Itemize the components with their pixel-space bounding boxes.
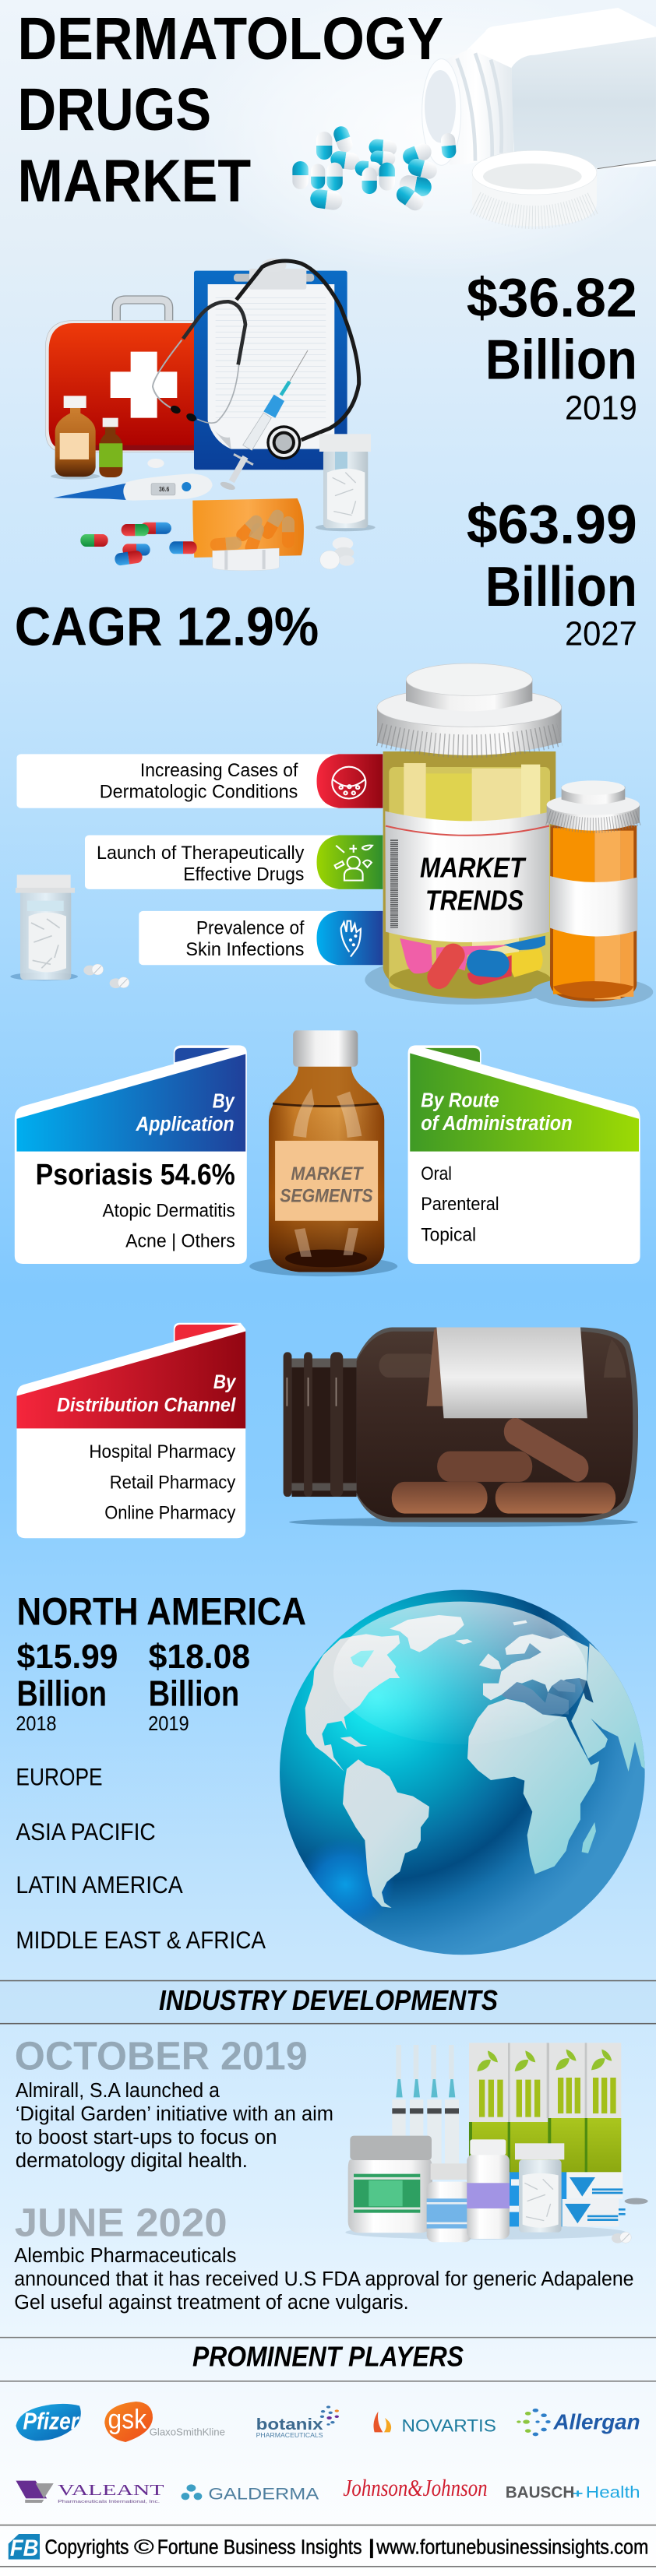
list: other regions: MIDDLE EAST & AFRICA xyxy=(16,1927,266,1954)
stat: 2027 market size: 2027 xyxy=(565,615,637,653)
image: first aid kit, clipboard, stethoscope and medicines xyxy=(45,259,376,571)
logo: GSK xyxy=(104,2402,225,2442)
footer: Fortune Business Insights xyxy=(157,2536,362,2558)
stat: north america 2018: Billion xyxy=(16,1673,107,1714)
stat: 2019 market size: $36.82 xyxy=(467,267,637,329)
development: october 2019: OCTOBER 2019 xyxy=(15,2035,308,2078)
development: june 2020: Alembic Pharmaceuticals xyxy=(14,2244,236,2267)
logo: Valeant: VALEANT xyxy=(58,2481,164,2498)
stat: north america 2019 xyxy=(148,1638,250,1735)
logo: Novartis xyxy=(373,2412,496,2436)
image: first aid kit, clipboard, stethoscope and medicines: 36.6 xyxy=(159,486,170,493)
development: june 2020: Gel useful against treatment of acne vulgaris. xyxy=(14,2290,409,2314)
trend: increasing cases xyxy=(16,754,383,808)
stat: north america 2018 xyxy=(16,1638,118,1735)
image: brown bottle on its side xyxy=(284,1327,638,1527)
trend: skin infections: Skin Infections xyxy=(185,939,304,960)
small orange bottle xyxy=(531,780,653,1008)
heading: north america: NORTH AMERICA xyxy=(16,1589,306,1633)
stat: CAGR: CAGR 12.9% xyxy=(15,596,319,656)
large yellow jar with market trends label: TRENDS xyxy=(425,884,524,916)
title xyxy=(18,6,443,215)
large yellow jar with market trends label: MARKET xyxy=(420,852,527,884)
icon: skin condition xyxy=(332,767,365,799)
stat: 2027 market size xyxy=(467,494,637,653)
heading band: industry developments xyxy=(0,1980,656,2024)
panel: by application: Psoriasis 54.6% xyxy=(36,1158,235,1191)
heading: by application: Application xyxy=(136,1113,235,1135)
amber bottle with market segments label: MARKET xyxy=(291,1163,365,1184)
stat: north america 2019: Billion xyxy=(149,1673,239,1714)
footer: Copyrights xyxy=(44,2536,129,2558)
list: other regions: ASIA PACIFIC xyxy=(16,1818,156,1846)
stat: 2027 market size: $63.99 xyxy=(467,494,637,555)
amber bottle with market segments label xyxy=(249,1030,397,1276)
heading: by distribution channel xyxy=(57,1372,236,1416)
development: october 2019 xyxy=(15,2035,333,2172)
heading: by route: By Route xyxy=(421,1089,499,1111)
panel: by distribution channel: Hospital Pharmacy xyxy=(89,1442,235,1462)
trend: skin infections: Prevalence of xyxy=(196,917,305,938)
stat: north america 2018: 2018 xyxy=(16,1713,56,1735)
stat: north america 2019: 2019 xyxy=(148,1713,189,1735)
icon: Fortune Business Insights logo xyxy=(9,2534,40,2561)
logo: Botanix: botanix xyxy=(256,2416,323,2433)
image: medicines group xyxy=(345,2043,648,2243)
logo: GSK: GlaxoSmithKline xyxy=(150,2426,225,2437)
stat: 2019 market size: Billion xyxy=(485,329,637,391)
panel: by route of administration xyxy=(408,1045,640,1264)
title: MARKET xyxy=(18,148,251,215)
title: DRUGS xyxy=(18,77,211,143)
logo: Valeant xyxy=(16,2481,164,2504)
icon: Fortune Business Insights logo: FB xyxy=(10,2535,38,2561)
heading: by application xyxy=(136,1089,235,1135)
stat: 2027 market size: Billion xyxy=(485,556,637,618)
logo: Valeant: Pharmaceuticals International, Inc. xyxy=(58,2499,160,2504)
trend: therapeutically effective drugs: Launch of Therapeutically xyxy=(97,843,305,864)
logo: Pfizer xyxy=(16,2404,81,2441)
footer: © xyxy=(134,2536,154,2558)
trend: increasing cases: Increasing Cases of xyxy=(140,760,298,781)
icon: patient with drugs xyxy=(335,845,372,881)
development: october 2019: dermatology digital health. xyxy=(16,2148,248,2172)
logo: Novartis: NOVARTIS xyxy=(402,2416,496,2436)
panel: by distribution channel: Retail Pharmacy xyxy=(110,1473,235,1493)
large yellow jar with market trends label xyxy=(365,663,570,1005)
heading: by application: By xyxy=(213,1089,235,1112)
development: october 2019: Almirall, S.A launched a xyxy=(16,2079,220,2102)
panel: by application: Atopic Dermatitis xyxy=(103,1201,235,1222)
logo: Allergan xyxy=(517,2409,640,2436)
logo: Botanix xyxy=(256,2405,339,2439)
development: june 2020 xyxy=(14,2201,634,2314)
trend: therapeutically effective drugs: Effective Drugs xyxy=(183,864,304,885)
trend: therapeutically effective drugs xyxy=(85,835,383,889)
icon: clear pill bottle with tablets xyxy=(10,875,129,988)
heading band: prominent players: PROMINENT PLAYERS xyxy=(192,2341,464,2372)
logo: Johnson and Johnson: Johnson&Johnson xyxy=(343,2474,488,2501)
stat: north america 2019: $18.08 xyxy=(149,1638,250,1676)
image: globe xyxy=(280,1590,647,1955)
list: other regions xyxy=(16,1763,266,1954)
development: june 2020: JUNE 2020 xyxy=(15,2201,227,2245)
logo: Botanix: PHARMACEUTICALS xyxy=(256,2432,323,2439)
heading: by route: of Administration xyxy=(421,1112,573,1135)
stat: 2019 market size xyxy=(467,267,637,427)
image: white pill bottle and cap xyxy=(422,8,656,227)
icon: hand with spots xyxy=(341,921,361,957)
stat: 2019 market size: 2019 xyxy=(565,389,637,427)
development: october 2019: to boost start-ups to focus on xyxy=(16,2126,277,2148)
stat: north america 2018: $15.99 xyxy=(16,1638,118,1676)
trend: skin infections xyxy=(139,911,383,965)
panel: by distribution channel: Online Pharmacy xyxy=(104,1503,235,1523)
panel: by application xyxy=(15,1045,247,1264)
list: other regions: LATIN AMERICA xyxy=(16,1871,183,1899)
panel: by route of administration: Oral xyxy=(421,1163,452,1184)
panel: by route of administration: Parenteral xyxy=(421,1195,499,1215)
panel: by route of administration: Topical xyxy=(421,1225,476,1245)
development: october 2019: ‘Digital Garden’ initiative with an aim xyxy=(16,2103,333,2125)
logo: Pfizer: Pfizer xyxy=(23,2408,79,2434)
panel: by distribution channel xyxy=(16,1323,245,1538)
logo: Galderma xyxy=(182,2484,319,2504)
title: DERMATOLOGY xyxy=(18,6,443,72)
list: other regions: EUROPE xyxy=(16,1763,103,1790)
logo: Galderma: GALDERMA xyxy=(208,2485,319,2504)
heading: by distribution channel: Distribution Channel xyxy=(57,1395,236,1416)
heading: by distribution channel: By xyxy=(213,1372,236,1393)
logo: Bausch Health: BAUSCH xyxy=(506,2483,574,2502)
footer xyxy=(0,2525,656,2567)
trend: increasing cases: Dermatologic Conditions xyxy=(100,781,298,802)
footer: | xyxy=(367,2536,376,2558)
heading band: industry developments: INDUSTRY DEVELOPMENTS xyxy=(159,1985,498,2016)
panel: by application: Acne | Others xyxy=(125,1231,235,1251)
heading: by route xyxy=(421,1089,573,1135)
logo: GSK: gsk xyxy=(108,2404,146,2434)
image: spilled capsules xyxy=(292,125,457,214)
amber bottle with market segments label: SEGMENTS xyxy=(280,1185,373,1206)
